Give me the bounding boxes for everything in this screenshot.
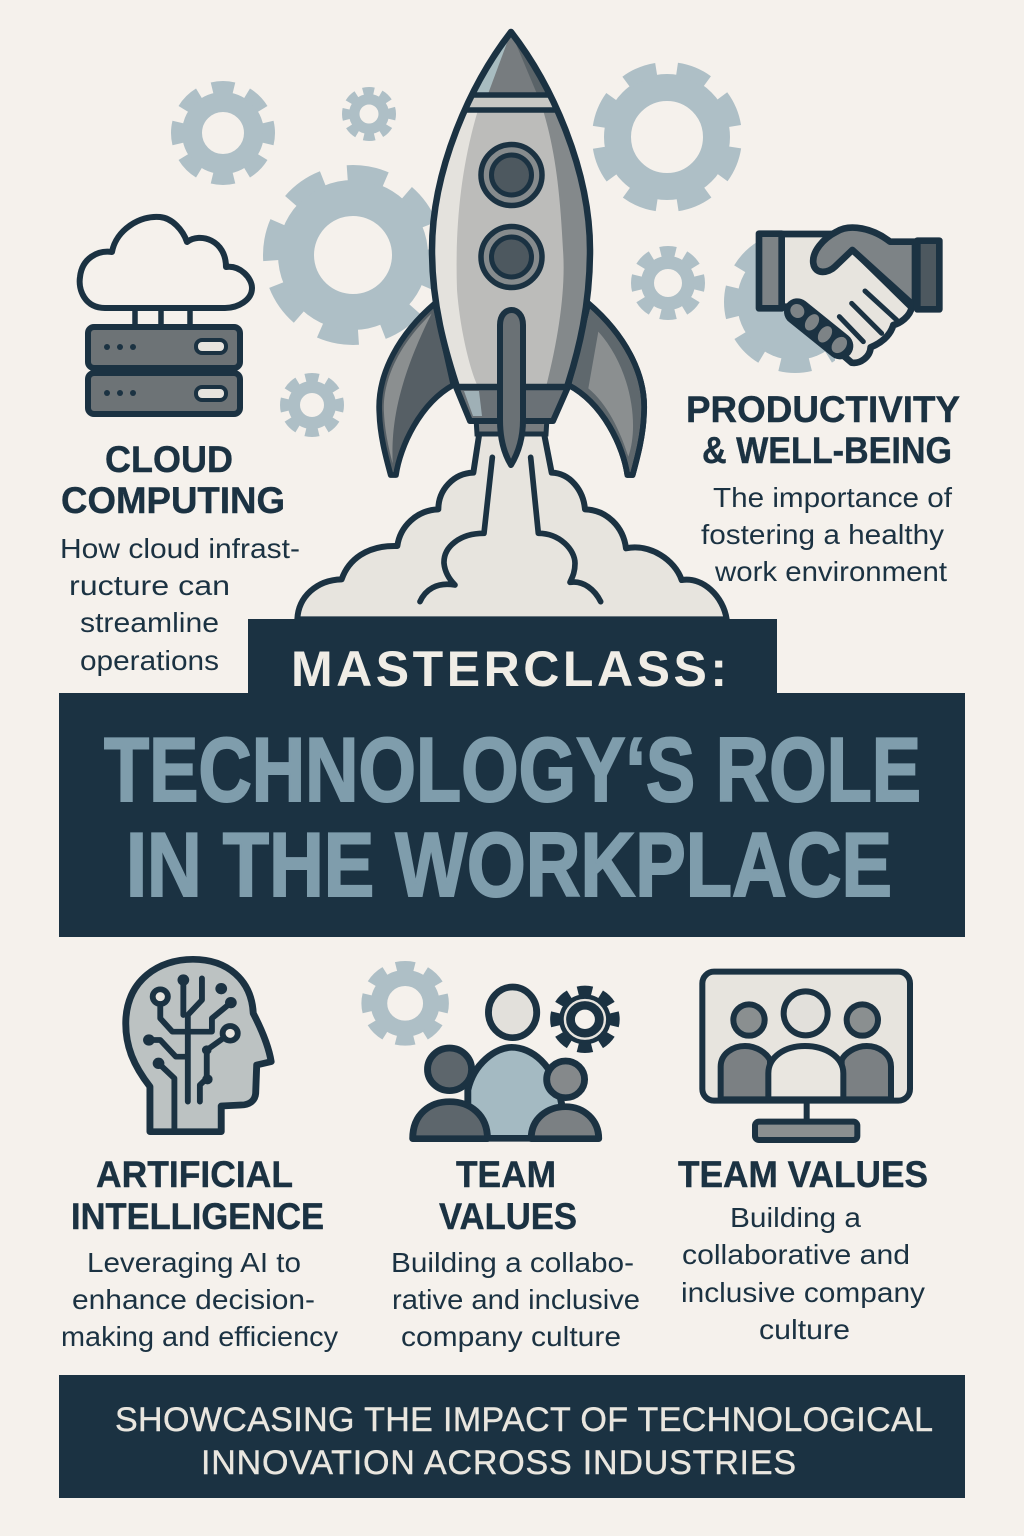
description: inclusive company <box>681 1277 925 1308</box>
light hand <box>780 234 912 363</box>
person left <box>413 1048 487 1139</box>
text: productivity description: work environment <box>714 556 947 587</box>
gear: small lower left <box>284 378 340 432</box>
heading: productivity and well-being: PRODUCTIVITY <box>686 389 960 430</box>
heading: productivity and well-being: & WELL-BEING <box>702 430 952 471</box>
head outline <box>126 959 271 1132</box>
person centre body <box>468 1047 561 1138</box>
heading: ARTIFICIAL <box>96 1154 293 1195</box>
description <box>391 1247 640 1352</box>
heading: cloud computing: CLOUD <box>105 439 233 480</box>
dark hand <box>813 228 915 307</box>
heading <box>71 1154 324 1237</box>
cuff right <box>917 241 939 309</box>
column: artificial intelligence <box>61 1154 338 1352</box>
description: culture <box>759 1314 850 1345</box>
text: cloud computing description: How cloud infrast- <box>60 533 300 564</box>
gear: small top <box>346 91 392 137</box>
column: team values centre <box>391 1154 640 1352</box>
banner tab <box>248 619 777 695</box>
description: enhance decision- <box>72 1284 315 1315</box>
icon: cloud and servers <box>80 217 252 414</box>
description: collaborative and <box>682 1239 910 1270</box>
description: company culture <box>401 1321 621 1352</box>
heading: INTELLIGENCE <box>71 1196 324 1237</box>
icon: monitor with team <box>702 972 910 1140</box>
people right <box>842 1004 891 1099</box>
description: Building a <box>730 1202 861 1233</box>
footer text: INNOVATION ACROSS INDUSTRIES <box>201 1444 796 1482</box>
column: team values right <box>678 1154 928 1345</box>
icon: rocket <box>379 30 644 475</box>
description: rative and inclusive <box>392 1284 640 1315</box>
description: Leveraging AI to <box>87 1247 301 1278</box>
icon: handshake <box>759 228 939 363</box>
people left <box>721 1004 770 1099</box>
heading: cloud computing <box>61 439 285 521</box>
description: Building a collabo- <box>391 1247 634 1278</box>
description <box>681 1202 925 1345</box>
person right <box>531 1061 599 1139</box>
heading: TEAM <box>456 1154 556 1195</box>
person top head <box>488 987 537 1038</box>
cuff left <box>759 234 782 308</box>
gear: small right <box>636 252 700 314</box>
background gears <box>177 69 859 432</box>
rocket fins <box>379 303 644 475</box>
server lower <box>88 373 240 414</box>
icon: smoke cloud <box>297 433 727 619</box>
heading: VALUES <box>439 1196 577 1237</box>
heading <box>439 1154 577 1237</box>
icon: team with gears <box>367 966 615 1139</box>
text: productivity description: fostering a healthy <box>701 519 944 550</box>
text: cloud computing description: ructure can <box>69 570 230 601</box>
people centre <box>768 991 843 1099</box>
pale gear <box>367 966 444 1041</box>
text: productivity description <box>701 482 952 587</box>
server upper <box>88 327 240 368</box>
gear: large left <box>258 160 448 350</box>
monitor stand <box>798 1102 816 1121</box>
description <box>61 1247 338 1352</box>
rocket body <box>425 30 600 390</box>
rocket window lower <box>481 226 542 288</box>
heading: productivity and well-being <box>686 389 960 471</box>
gear: top right <box>599 69 735 205</box>
rocket centre fin <box>500 310 523 465</box>
footer banner <box>59 1375 965 1498</box>
monitor base <box>755 1122 857 1140</box>
title banner <box>59 619 965 937</box>
footer text <box>115 1401 933 1482</box>
text: productivity description: The importance of <box>713 482 952 513</box>
heading: cloud computing: COMPUTING <box>61 480 285 521</box>
circuit nodes <box>143 974 237 1084</box>
rocket window upper <box>481 144 542 206</box>
connector lines <box>135 308 190 328</box>
description: making and efficiency <box>61 1321 338 1352</box>
circuit traces <box>149 978 231 1130</box>
title: masterclass: MASTERCLASS: <box>291 641 727 697</box>
text: cloud computing description <box>60 533 300 676</box>
title: main: IN THE WORKPLACE <box>126 815 892 916</box>
icon: AI head <box>126 959 271 1132</box>
rocket base <box>456 387 568 434</box>
finger lines <box>839 291 897 342</box>
gear: top left <box>177 87 269 179</box>
knuckles <box>787 301 850 356</box>
cloud <box>80 217 252 308</box>
text: cloud computing description: streamline <box>80 607 219 638</box>
text: cloud computing description: operations <box>80 645 219 676</box>
banner main <box>59 693 965 937</box>
dark gear <box>555 991 615 1048</box>
footer text: SHOWCASING THE IMPACT OF TECHNOLOGICAL <box>115 1401 933 1439</box>
heading: TEAM VALUES <box>678 1154 928 1195</box>
title: main <box>104 720 921 916</box>
gear: behind handshake <box>724 243 835 373</box>
monitor screen <box>702 972 910 1101</box>
